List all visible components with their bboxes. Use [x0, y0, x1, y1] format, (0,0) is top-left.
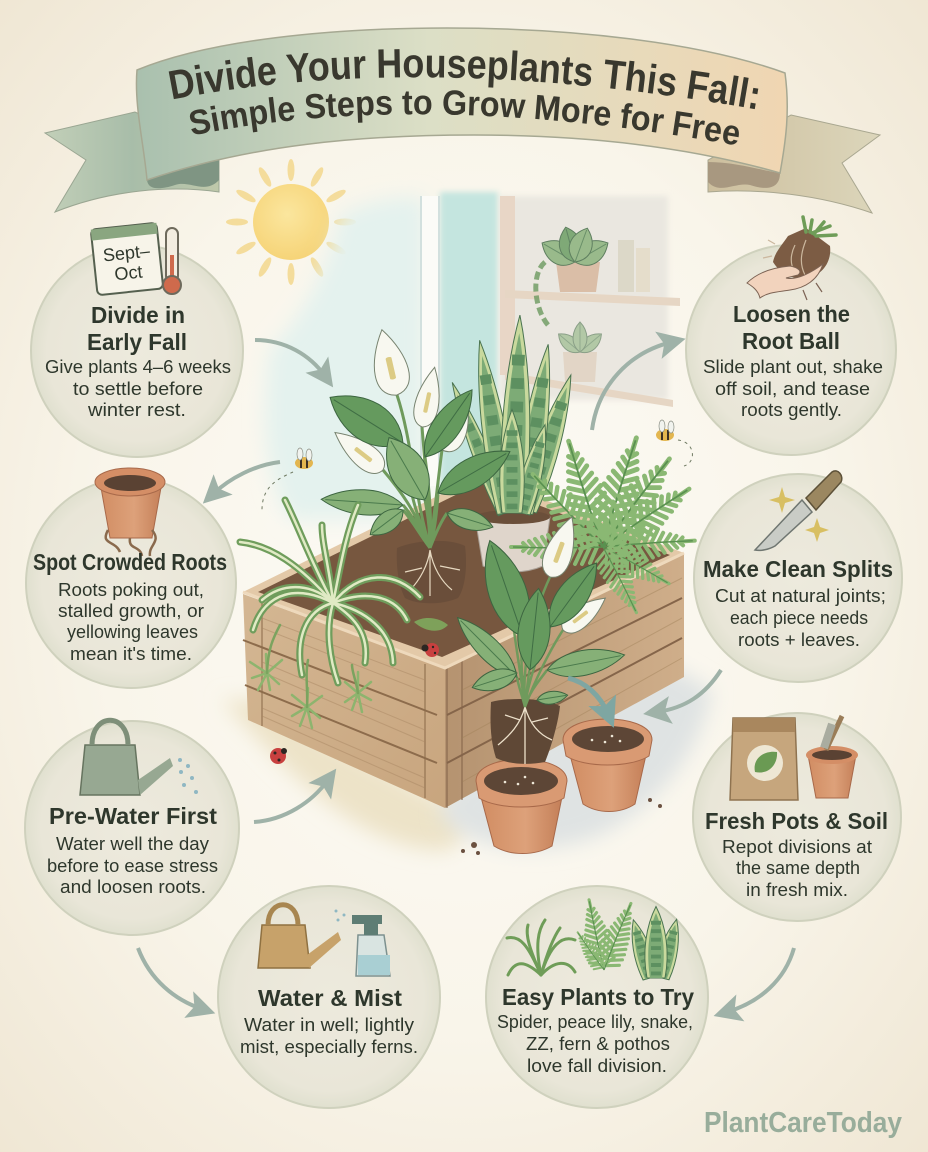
panel: pre-water first: [25, 720, 239, 935]
icon: thermometer: [163, 228, 181, 294]
body text: Give plants 4–6 weeks: [45, 357, 231, 377]
heading: Easy Plants to Try: [502, 984, 694, 1010]
terracotta pot back: [563, 719, 652, 812]
body text: [240, 1015, 418, 1057]
icon: copper watering can: [258, 905, 341, 968]
watermark: PlantCareToday: [704, 1107, 902, 1139]
body text: [47, 834, 218, 897]
spathes: [365, 326, 413, 399]
panel: loosen the root ball: [686, 217, 896, 455]
body text: winter rest.: [87, 400, 186, 420]
shelf: [500, 196, 668, 400]
icon: calendar: Sept–: [102, 241, 151, 265]
icon: snake plant: [625, 906, 685, 980]
ribbon left tail: [45, 112, 219, 212]
arrow: root ball to pot: [568, 678, 608, 714]
heading: Pre-Water First: [49, 803, 217, 829]
icon: hand holding root ball: [747, 217, 836, 300]
stems: [513, 577, 563, 707]
body text: in fresh mix.: [746, 880, 848, 900]
ground wash under crate: [222, 660, 712, 851]
panel: water and mist: [218, 886, 440, 1108]
body text: Cut at natural joints;: [715, 586, 886, 606]
body text: stalled growth, or: [58, 601, 204, 621]
icon: pot with roots: [95, 468, 165, 556]
icon: spider plant: [507, 920, 575, 975]
body text: mist, especially ferns.: [240, 1037, 418, 1057]
heading: Root Ball: [742, 328, 840, 354]
icon: calendar: Oct: [113, 262, 143, 284]
scene: window and shelf background: [265, 192, 680, 520]
arrow: scene to loosen root ball: [592, 342, 672, 430]
spider plant: [240, 500, 420, 683]
root ball: [397, 541, 466, 603]
leaves: [472, 534, 541, 643]
body text: [703, 357, 883, 420]
second peace lily with root ball: [450, 512, 627, 764]
crate right face: [445, 553, 684, 808]
arrow: early fall to scene: [255, 340, 325, 376]
panel: fresh pots and soil: [693, 713, 901, 921]
body text: before to ease stress: [47, 856, 218, 876]
icon: calendar: [91, 223, 163, 295]
title line 1: Divide Your Houseplants This Fall:: [168, 49, 758, 110]
moss on soil: [414, 618, 448, 631]
body text: mean it's time.: [70, 644, 192, 664]
body text: roots gently.: [741, 400, 842, 420]
body text: the same depth: [736, 858, 860, 878]
icon: spray bottle: [334, 910, 390, 976]
ladybug on ground: [270, 748, 287, 764]
crate seedlings: [250, 625, 371, 728]
body text: Repot divisions at: [722, 837, 872, 857]
body text: [722, 837, 872, 900]
heading: [87, 302, 187, 355]
soil crumbs: [461, 798, 662, 855]
arrow: to crowded roots: [213, 462, 280, 494]
heading: Divide in: [91, 302, 185, 328]
fern: [511, 432, 700, 619]
snake plant: [444, 315, 583, 572]
body text: off soil, and tease: [715, 379, 870, 399]
title line 2: Simple Steps to Grow More for Free: [190, 90, 739, 145]
body text: [497, 1012, 693, 1076]
arrow: pre-water to scene: [254, 780, 328, 822]
icon: watering can: [80, 720, 198, 795]
icon: sparkles: [769, 487, 829, 542]
terracotta pot front: [476, 759, 567, 854]
body text: Spider, peace lily, snake,: [497, 1012, 693, 1032]
body text: to settle before: [73, 379, 203, 399]
body text: each piece needs: [730, 608, 868, 628]
arrow: to crate from fresh pots: [657, 670, 721, 712]
peace lily with root ball: [320, 326, 517, 603]
panel: divide in early fall: [31, 223, 243, 457]
heading: Early Fall: [87, 329, 187, 355]
body text: Slide plant out, shake: [703, 357, 883, 377]
heading: [733, 301, 850, 354]
stems: [383, 395, 447, 548]
body text: and loosen roots.: [60, 877, 206, 897]
snake plant pot: [475, 510, 550, 572]
icon: soil bag: [730, 718, 798, 800]
heading: Fresh Pots & Soil: [705, 808, 888, 834]
icon: pot and trowel: [806, 716, 858, 798]
heading: Loosen the: [733, 301, 850, 327]
bee right: [656, 420, 692, 466]
heading: Water & Mist: [258, 985, 402, 1011]
icon: sun: [226, 159, 356, 285]
shelf plants: [536, 224, 613, 325]
body text: [715, 586, 886, 650]
spathes: [537, 512, 585, 582]
crate left face: [243, 594, 445, 808]
panel: easy plants to try: [486, 886, 708, 1108]
body text: yellowing leaves: [67, 622, 198, 642]
ribbon right tail: [708, 115, 880, 213]
panel: make clean splits: [694, 471, 902, 682]
root ball: [491, 699, 560, 764]
body text: [58, 580, 204, 664]
heading: Spot Crowded Roots: [33, 549, 227, 575]
body text: love fall division.: [527, 1056, 667, 1076]
arrow: to easy plants: [727, 948, 794, 1012]
leaves: [320, 381, 414, 460]
crate rim and soil: [243, 475, 684, 668]
icon: fern: [571, 897, 643, 975]
bee left: [262, 448, 313, 510]
icon: knife: [755, 471, 842, 550]
panel: spot crowded roots: [26, 468, 236, 688]
arrow: to water and mist: [138, 948, 202, 1009]
body text: Water well the day: [56, 834, 209, 854]
ladybug on crate: [422, 643, 439, 657]
body text: roots + leaves.: [738, 630, 860, 650]
heading: Make Clean Splits: [703, 556, 893, 582]
wooden crate: [243, 475, 684, 808]
body text: [45, 357, 231, 420]
ribbon main band: [136, 28, 787, 180]
body text: Roots poking out,: [58, 580, 204, 600]
body text: Water in well; lightly: [244, 1015, 414, 1035]
body text: ZZ, fern & pothos: [526, 1034, 670, 1054]
banner ribbon: [44, 27, 881, 214]
